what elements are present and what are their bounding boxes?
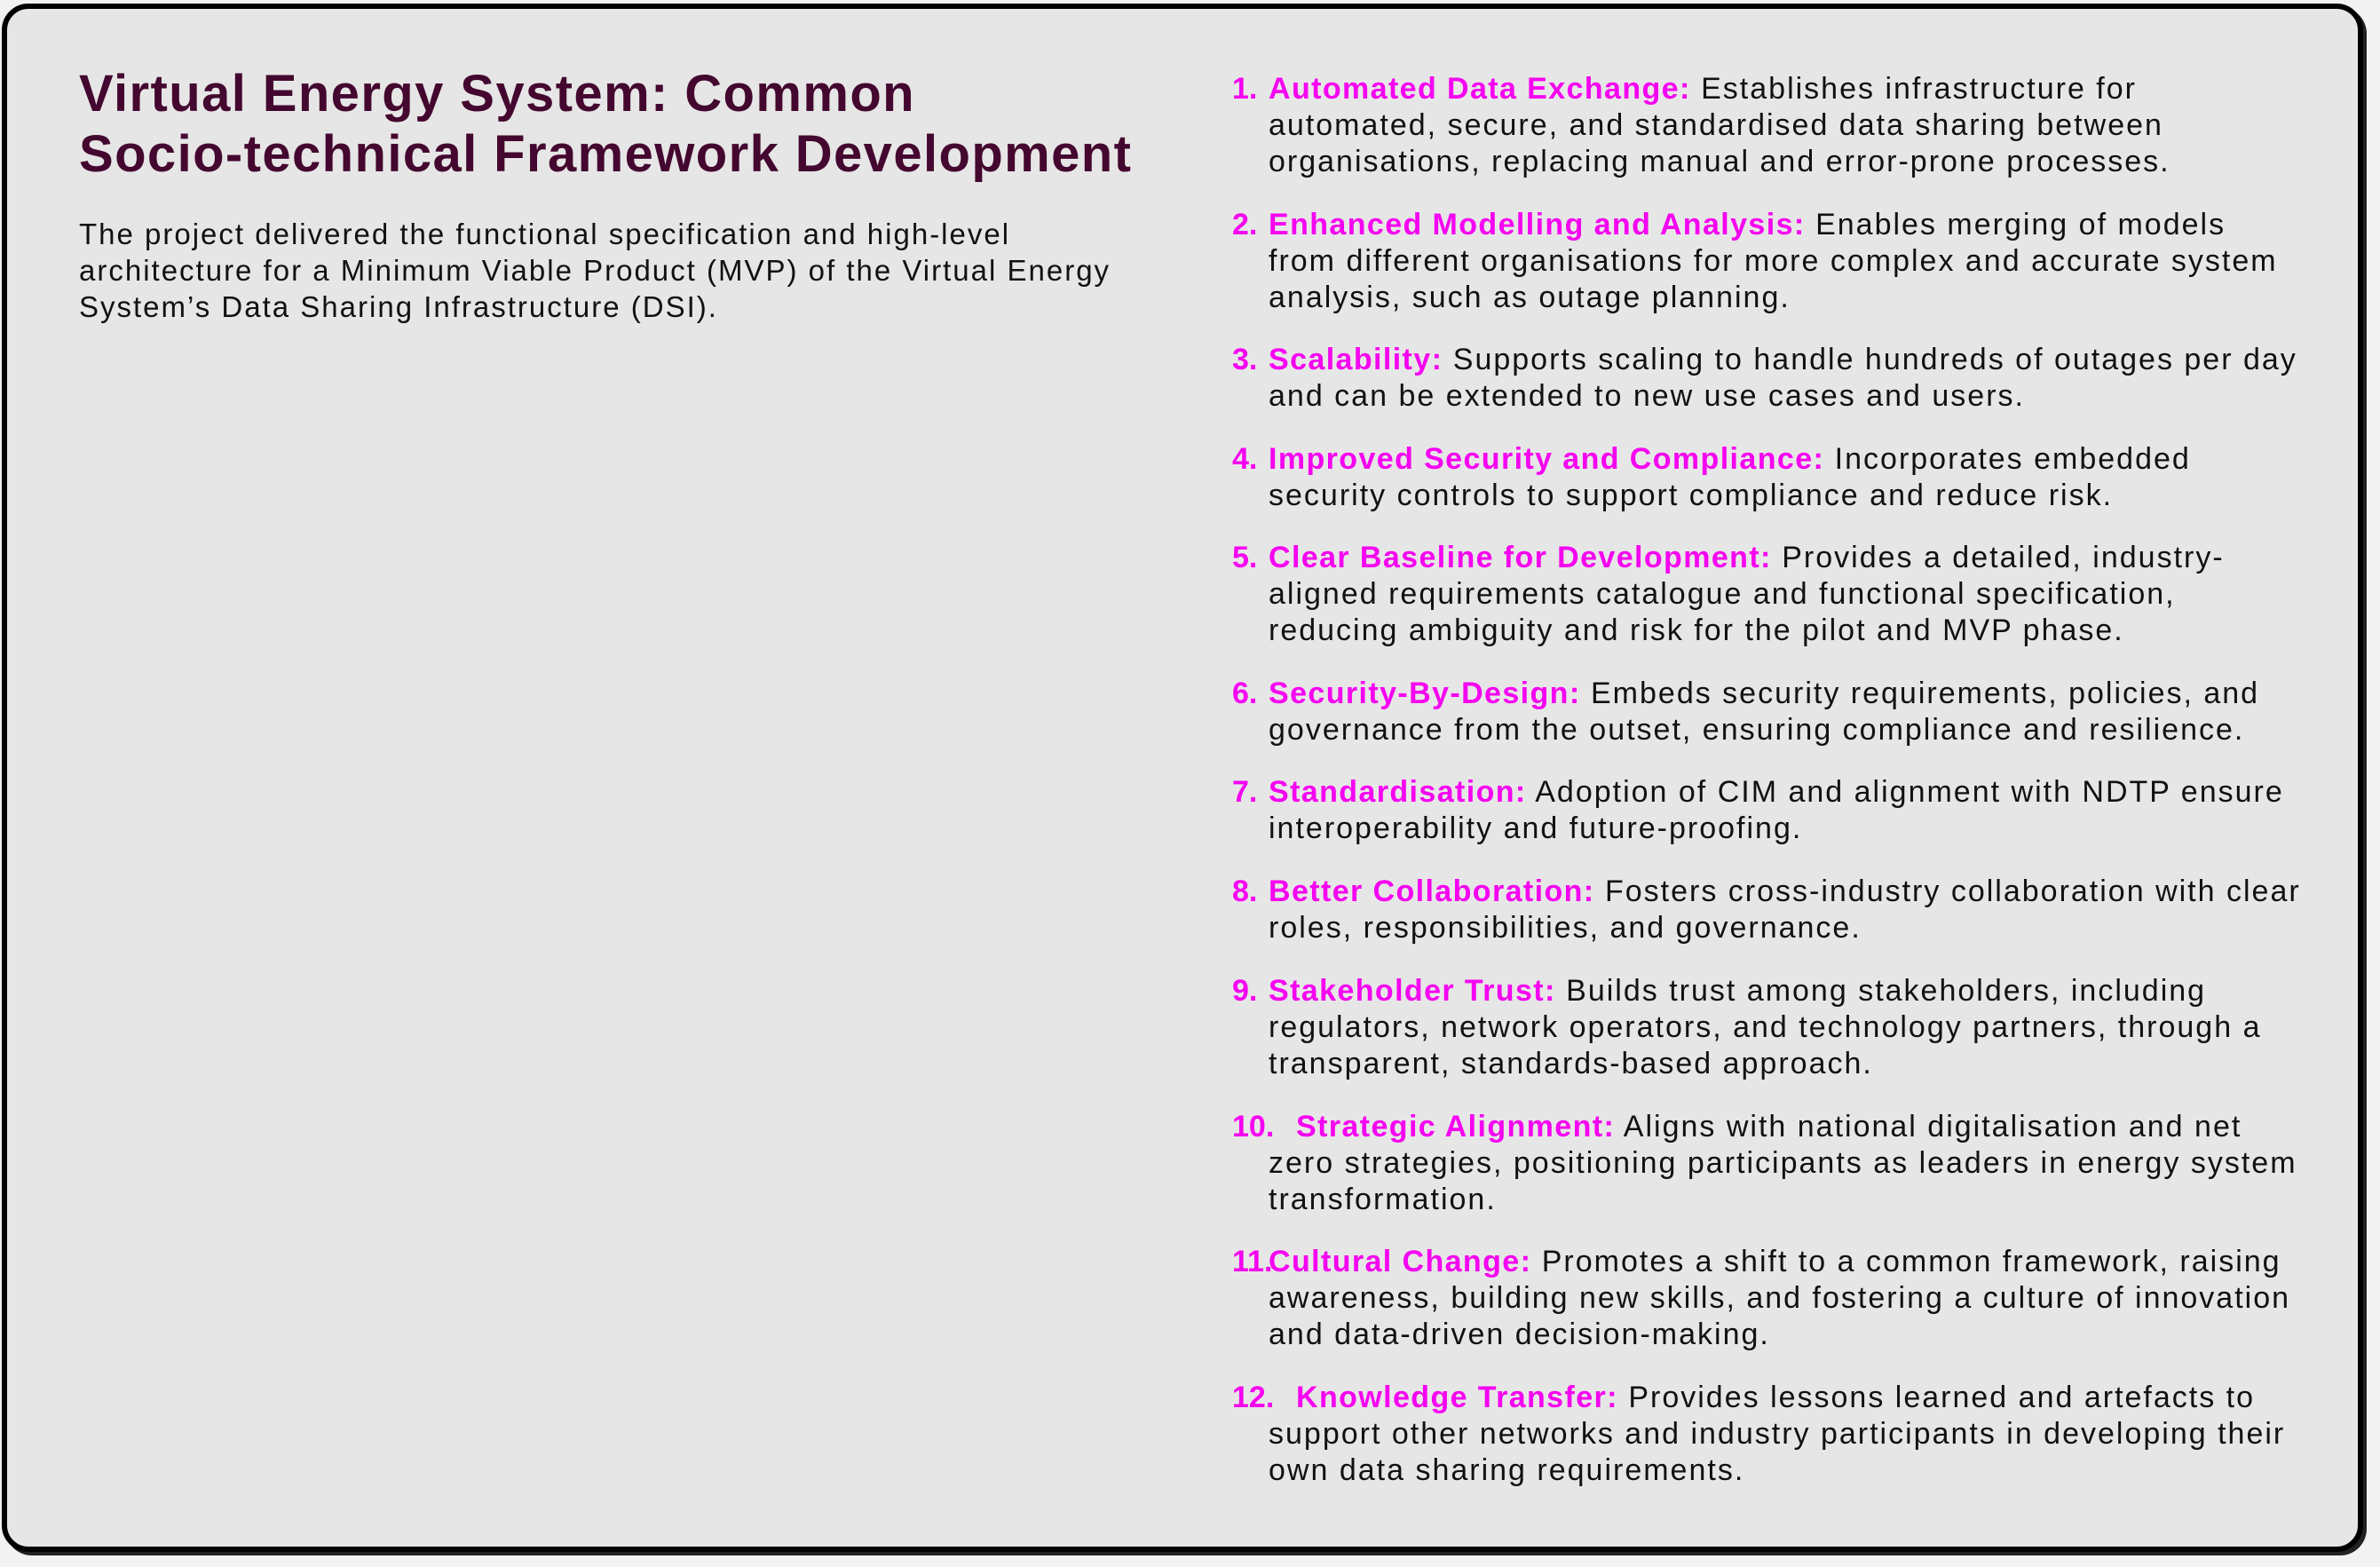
title: Socio-technical Framework Development xyxy=(79,125,1132,183)
list item 2 xyxy=(1232,208,2278,314)
list item 3: Scalability: Supports scaling to handle hundreds of outages per day xyxy=(1269,343,2297,376)
list item 6 xyxy=(1232,677,2259,747)
list item 12: Knowledge Transfer: Provides lessons learned and artefacts to xyxy=(1296,1381,2255,1414)
list item 11: Cultural Change: Promotes a shift to a common framework, raising xyxy=(1269,1245,2281,1278)
list item 3: and can be extended to new use cases and users. xyxy=(1269,379,2025,413)
list item 12 xyxy=(1232,1381,2285,1487)
list item 1 xyxy=(1232,72,2170,178)
list item 2: from different organisations for more complex and accurate system xyxy=(1269,244,2278,278)
list item 7 xyxy=(1232,775,2284,845)
text block: intro: System’s Data Sharing Infrastructure (DSI). xyxy=(79,290,718,323)
text block: intro xyxy=(79,218,1111,323)
text block: intro: The project delivered the functional specification and high-level xyxy=(79,218,1010,250)
list item 10 xyxy=(1232,1110,2297,1216)
list item 9: Stakeholder Trust: Builds trust among stakeholders, including xyxy=(1269,974,2206,1008)
list item 1: Automated Data Exchange: Establishes infrastructure for xyxy=(1269,72,2137,106)
list item 4: security controls to support compliance and reduce risk. xyxy=(1269,479,2113,512)
list item 7: Standardisation: Adoption of CIM and alignment with NDTP ensure xyxy=(1269,775,2284,809)
list item 3 xyxy=(1232,343,2297,413)
list item 6: Security-By-Design: Embeds security requirements, policies, and xyxy=(1269,677,2259,710)
list item 12: support other networks and industry participants in developing their xyxy=(1269,1417,2285,1451)
list item 7: 7. xyxy=(1232,775,1257,809)
list item 4: 4. xyxy=(1232,442,1257,476)
list item 11 xyxy=(1232,1245,2290,1351)
title xyxy=(79,65,1132,183)
list item 6: 6. xyxy=(1232,677,1257,710)
list item 5: reducing ambiguity and risk for the pilot and MVP phase. xyxy=(1269,613,2124,647)
list item 12: 12. xyxy=(1232,1381,1274,1414)
list item 8: roles, responsibilities, and governance. xyxy=(1269,911,1862,945)
list item 8: 8. xyxy=(1232,875,1257,908)
list item 9: transparent, standards-based approach. xyxy=(1269,1047,1873,1080)
list item 4: Improved Security and Compliance: Incorporates embedded xyxy=(1269,442,2191,476)
list item 12: own data sharing requirements. xyxy=(1269,1453,1744,1487)
list item 7: interoperability and future-proofing. xyxy=(1269,811,1802,845)
text block: intro: architecture for a Minimum Viable Product (MVP) of the Virtual Energy xyxy=(79,254,1111,287)
list item 10: 10. xyxy=(1232,1110,1274,1144)
list item 3: 3. xyxy=(1232,343,1257,376)
title: Virtual Energy System: Common xyxy=(79,65,915,123)
list item 9: regulators, network operators, and technology partners, through a xyxy=(1269,1010,2261,1044)
list item 1: organisations, replacing manual and error-prone processes. xyxy=(1269,145,2170,178)
list item 11: 11. xyxy=(1232,1245,1272,1278)
list item 10: zero strategies, positioning participants as leaders in energy system xyxy=(1269,1146,2297,1180)
list item 6: governance from the outset, ensuring compliance and resilience. xyxy=(1269,713,2244,747)
list item 5: aligned requirements catalogue and functional specification, xyxy=(1269,577,2176,611)
list item 1: 1. xyxy=(1232,72,1257,106)
list item 5 xyxy=(1232,541,2225,647)
list item 2: Enhanced Modelling and Analysis: Enables merging of models xyxy=(1269,208,2226,241)
list item 10: transformation. xyxy=(1269,1183,1497,1216)
list item 5: 5. xyxy=(1232,541,1257,574)
list item 9 xyxy=(1232,974,2261,1080)
list item 2: 2. xyxy=(1232,208,1257,241)
list item 11: awareness, building new skills, and fostering a culture of innovation xyxy=(1269,1281,2290,1315)
list item 10: Strategic Alignment: Aligns with national digitalisation and net xyxy=(1296,1110,2242,1144)
list item 4 xyxy=(1232,442,2191,512)
list item 5: Clear Baseline for Development: Provides a detailed, industry- xyxy=(1269,541,2225,574)
list item 8: Better Collaboration: Fosters cross-industry collaboration with clear xyxy=(1269,875,2301,908)
list item 11: and data-driven decision-making. xyxy=(1269,1318,1770,1351)
list item 9: 9. xyxy=(1232,974,1257,1008)
list item 8 xyxy=(1232,875,2301,945)
list item 2: analysis, such as outage planning. xyxy=(1269,281,1791,314)
list item 1: automated, secure, and standardised data sharing between xyxy=(1269,108,2163,142)
